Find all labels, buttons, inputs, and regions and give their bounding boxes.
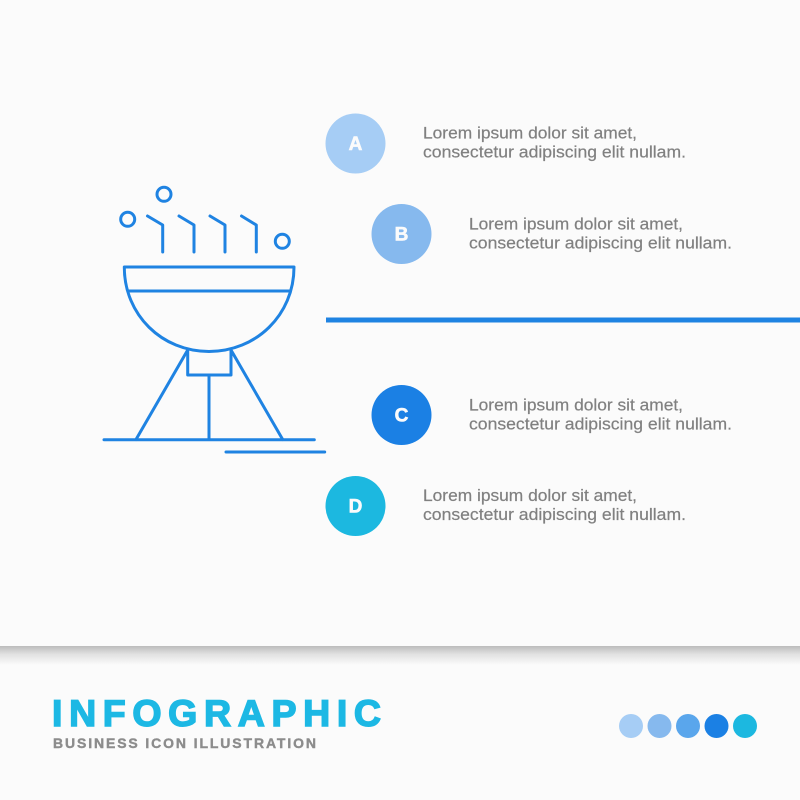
- colour dots: [619, 714, 757, 738]
- item D: consectetur adipiscing elit nullam.: [423, 506, 686, 524]
- item C: Lorem ipsum dolor sit amet,: [469, 396, 683, 414]
- item C: C: [395, 406, 409, 426]
- footer shadow band: [0, 646, 800, 665]
- item D: Lorem ipsum dolor sit amet,: [423, 487, 637, 505]
- item B: Lorem ipsum dolor sit amet,: [469, 216, 683, 234]
- item A: Lorem ipsum dolor sit amet,: [423, 124, 637, 142]
- item A: [326, 114, 686, 174]
- item A: A: [349, 134, 363, 155]
- divider line: [326, 318, 800, 322]
- item C: consectetur adipiscing elit nullam.: [469, 416, 732, 434]
- item B: [372, 204, 732, 264]
- title: INFOGRAPHIC: [52, 692, 381, 734]
- item A: consectetur adipiscing elit nullam.: [423, 144, 686, 162]
- item C: [372, 385, 732, 445]
- item B: B: [395, 224, 408, 246]
- icon: barbecue grill: [104, 187, 325, 452]
- item D: D: [349, 496, 362, 518]
- item D: [326, 476, 686, 536]
- item B: consectetur adipiscing elit nullam.: [469, 234, 732, 252]
- subtitle: BUSINESS ICON ILLUSTRATION: [53, 735, 316, 751]
